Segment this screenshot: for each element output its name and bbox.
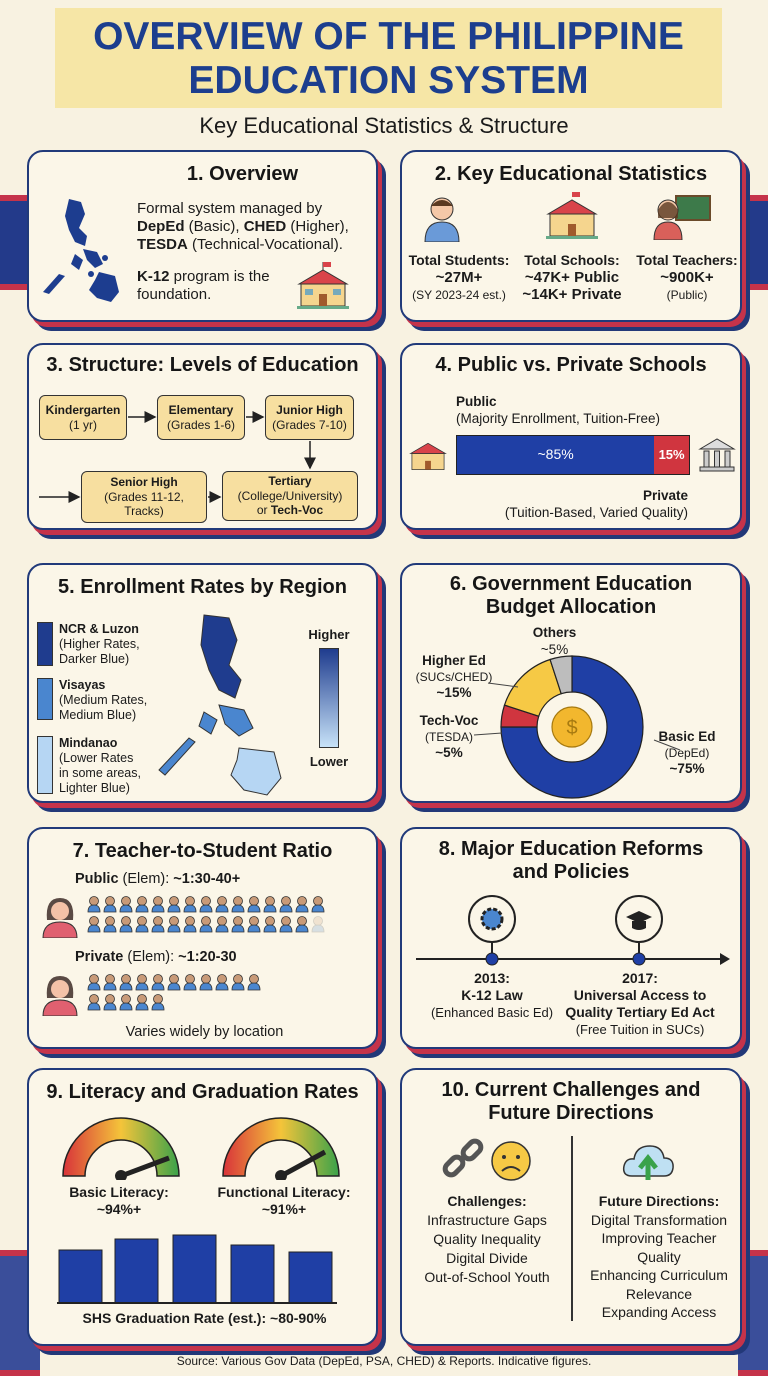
legend: Medium Blue) bbox=[59, 708, 136, 722]
heading bbox=[450, 573, 692, 618]
text: 2013: K-12 Law bbox=[461, 987, 523, 1003]
icon: school bbox=[297, 262, 349, 309]
icon: teacher public bbox=[42, 898, 78, 938]
legend: Lighter Blue) bbox=[59, 781, 130, 795]
title: EDUCATION SYSTEM bbox=[188, 59, 589, 102]
flow diagram: Junior High bbox=[276, 403, 343, 417]
panel: 7 teacher ratio bbox=[27, 827, 378, 1049]
legend: Mindanao bbox=[59, 736, 117, 750]
text: public label bbox=[456, 394, 660, 426]
text: private label: (Tuition-Based, Varied Quality) bbox=[505, 505, 688, 520]
donut chart: $ bbox=[566, 717, 578, 739]
stat: schools: ~14K+ Private bbox=[522, 286, 622, 303]
students private bbox=[88, 974, 260, 1010]
stat: teachers bbox=[636, 252, 738, 302]
text: 2017 bbox=[565, 970, 715, 1037]
stat: students: Total Students: bbox=[409, 252, 509, 268]
label: tech-voc: Tech-Voc bbox=[420, 713, 478, 728]
legend: (Lower Rates bbox=[59, 751, 133, 765]
flow diagram: Tertiary bbox=[268, 474, 312, 488]
icon: student bbox=[424, 198, 460, 242]
text: functional literacy: ~91%+ bbox=[262, 1201, 306, 1217]
text: description: TESDA (Technical-Vocational). bbox=[137, 236, 343, 253]
panel: 6 budget bbox=[400, 563, 742, 803]
legend: in some areas, bbox=[59, 766, 141, 780]
text: future: Enhancing Curriculum bbox=[590, 1267, 728, 1283]
text: future: Quality bbox=[637, 1248, 681, 1264]
text: challenges: Out-of-School Youth bbox=[424, 1269, 550, 1285]
text: public ratio: Public (Elem): ~1:30-40+ bbox=[75, 871, 240, 887]
label: basic ed bbox=[658, 729, 716, 776]
legend: NCR & Luzon bbox=[59, 622, 139, 636]
text: public label: (Majority Enrollment, Tuition-Free) bbox=[456, 411, 660, 426]
bar chart bbox=[456, 435, 690, 475]
heading: 9. Literacy and Graduation Rates bbox=[46, 1081, 359, 1103]
text: basic literacy: ~94%+ bbox=[97, 1201, 141, 1217]
text: 2017: 2017: bbox=[622, 970, 658, 986]
flow diagram: Elementary bbox=[169, 403, 233, 417]
icon: cloud upload bbox=[620, 1138, 676, 1182]
panel: 8 reforms bbox=[400, 827, 742, 1049]
text: challenges: Digital Divide bbox=[446, 1250, 528, 1266]
label: others bbox=[533, 625, 576, 657]
label: basic ed: Basic Ed bbox=[658, 729, 716, 744]
text: private ratio: Private (Elem): ~1:20-30 bbox=[75, 949, 237, 965]
label: higher ed bbox=[416, 653, 492, 700]
text: graduation rate: SHS Graduation Rate (est.): ~80-90% bbox=[83, 1310, 326, 1326]
text: k-12: foundation. bbox=[137, 286, 211, 303]
title: OVERVIEW OF THE PHILIPPINE bbox=[93, 15, 684, 58]
stat: teachers: Total Teachers: bbox=[636, 252, 738, 268]
text: challenges: Quality Inequality bbox=[433, 1231, 541, 1247]
icon: sad face bbox=[490, 1140, 532, 1182]
text: 2017: (Free Tuition in SUCs) bbox=[576, 1022, 704, 1037]
label: others: Others bbox=[533, 625, 576, 640]
heading bbox=[442, 1079, 700, 1124]
legend: gradient scale: Lower bbox=[310, 754, 348, 769]
stat: schools: ~47K+ Public bbox=[525, 269, 619, 286]
stat: students bbox=[408, 252, 509, 302]
heading bbox=[439, 838, 703, 883]
text: future: Improving Teacher bbox=[602, 1230, 716, 1246]
text: public label: Public bbox=[456, 394, 497, 409]
text: basic literacy bbox=[69, 1184, 169, 1217]
legend: Visayas bbox=[59, 678, 105, 692]
heading: 4. Public vs. Private Schools bbox=[435, 354, 707, 376]
heading: 1. Overview bbox=[187, 163, 298, 185]
stat: students: ~27M+ bbox=[436, 269, 482, 286]
panel: 10 challenges bbox=[400, 1068, 742, 1346]
label: higher ed: ~15% bbox=[437, 685, 471, 700]
label: basic ed: ~75% bbox=[670, 761, 704, 776]
heading: 7. Teacher-to-Student Ratio bbox=[73, 840, 332, 862]
icon: broken chain bbox=[440, 1138, 486, 1184]
stat: teachers: (Public) bbox=[667, 288, 707, 302]
stat: schools bbox=[522, 252, 622, 303]
icon: school bbox=[409, 442, 447, 470]
bar chart: graduation bbox=[57, 1234, 337, 1304]
icon: teacher private bbox=[42, 976, 78, 1016]
heading: 8. Major Education Reforms bbox=[439, 838, 703, 860]
gauge: functional literacy bbox=[222, 1117, 340, 1180]
bar chart: ~85% bbox=[537, 446, 574, 462]
heading: Future Directions bbox=[488, 1102, 654, 1124]
heading: 2. Key Educational Statistics bbox=[435, 163, 707, 185]
label: others: ~5% bbox=[541, 642, 568, 657]
text: 2017: Universal Access to bbox=[574, 987, 706, 1003]
text: functional literacy bbox=[217, 1184, 351, 1217]
text: note: Varies widely by location bbox=[126, 1024, 283, 1040]
title bbox=[55, 8, 722, 108]
text: 2013 bbox=[431, 970, 553, 1020]
legend: Darker Blue) bbox=[59, 652, 129, 666]
legend: (Medium Rates, bbox=[59, 693, 147, 707]
text: future: Relevance bbox=[626, 1286, 692, 1302]
icon: teacher bbox=[654, 195, 711, 240]
flow diagram: (College/University) bbox=[238, 489, 342, 503]
stat: schools: Total Schools: bbox=[524, 252, 620, 268]
timeline bbox=[416, 895, 730, 966]
label: tech-voc bbox=[420, 713, 478, 760]
text: description: DepEd (Basic), CHED (Higher), bbox=[137, 218, 349, 235]
bar chart: 15% bbox=[659, 447, 685, 462]
text: future: Future Directions: bbox=[599, 1193, 719, 1209]
text: basic literacy: Basic Literacy: bbox=[69, 1184, 169, 1200]
text: k-12: K-12 program is the bbox=[137, 268, 270, 285]
text: description bbox=[137, 200, 349, 253]
text: future bbox=[574, 1192, 744, 1322]
label: higher ed: Higher Ed bbox=[422, 653, 486, 668]
flow diagram bbox=[39, 395, 358, 523]
label: higher ed: (SUCs/CHED) bbox=[416, 670, 492, 684]
panel: 3 structure bbox=[27, 343, 378, 530]
footer: source: Source: Various Gov Data (DepEd, PSA, CHED) & Reports. Indicative figures. bbox=[177, 1354, 591, 1368]
text: challenges bbox=[407, 1192, 567, 1287]
flow diagram: (Grades 11-12, bbox=[104, 490, 184, 504]
stat: students: (SY 2023-24 est.) bbox=[412, 288, 506, 302]
flow diagram: (Grades 1-6) bbox=[167, 418, 235, 432]
heading: 10. Current Challenges and bbox=[442, 1079, 700, 1101]
icon: school bbox=[546, 192, 598, 239]
map: regions bbox=[158, 614, 282, 796]
subtitle: Key Educational Statistics & Structure bbox=[199, 113, 569, 138]
legend: gradient scale: Higher bbox=[308, 627, 350, 642]
text: 2013: 2013: bbox=[474, 970, 510, 986]
panel: 1 overview bbox=[27, 150, 378, 322]
label: basic ed: (DepEd) bbox=[665, 746, 709, 760]
heading: 3. Structure: Levels of Education bbox=[46, 354, 359, 376]
panel: 9 literacy bbox=[27, 1068, 378, 1346]
label: tech-voc: (TESDA) bbox=[425, 730, 473, 744]
heading: and Policies bbox=[513, 861, 629, 883]
icon: philippines map bbox=[43, 199, 119, 302]
text: future: Expanding Access bbox=[602, 1304, 716, 1320]
panel: 5 enrollment by region bbox=[27, 563, 378, 803]
legend bbox=[37, 622, 147, 795]
divider bbox=[571, 1136, 573, 1321]
text: challenges: Infrastructure Gaps bbox=[427, 1212, 547, 1228]
label: tech-voc: ~5% bbox=[435, 745, 463, 760]
heading: 5. Enrollment Rates by Region bbox=[58, 576, 347, 598]
flow diagram: Tracks) bbox=[124, 504, 164, 518]
text: future: Digital Transformation bbox=[591, 1212, 727, 1228]
panel: 4 public vs private bbox=[400, 343, 742, 530]
text: private label bbox=[505, 488, 688, 520]
legend: (Higher Rates, bbox=[59, 637, 140, 651]
text: 2013: (Enhanced Basic Ed) bbox=[431, 1005, 553, 1020]
heading: Budget Allocation bbox=[486, 596, 656, 618]
text: 2017: Quality Tertiary Ed Act bbox=[565, 1004, 715, 1020]
flow diagram: (1 yr) bbox=[69, 418, 97, 432]
text: description: Formal system managed by bbox=[137, 200, 322, 217]
text: challenges: Challenges: bbox=[447, 1193, 527, 1209]
donut chart bbox=[474, 655, 680, 799]
flow diagram: Kindergarten bbox=[46, 403, 120, 417]
text: k-12 bbox=[137, 268, 270, 303]
flow diagram: or Tech-Voc bbox=[257, 503, 323, 517]
text: functional literacy: Functional Literacy: bbox=[217, 1184, 351, 1200]
text: private label: Private bbox=[643, 488, 688, 503]
gauge: basic literacy bbox=[62, 1117, 180, 1180]
legend: gradient scale bbox=[308, 627, 350, 769]
flow diagram: (Grades 7-10) bbox=[272, 418, 347, 432]
icon: bank bbox=[698, 438, 736, 472]
students public bbox=[88, 896, 324, 932]
heading: 6. Government Education bbox=[450, 573, 692, 595]
flow diagram: Senior High bbox=[110, 475, 178, 489]
stat: teachers: ~900K+ bbox=[660, 269, 714, 286]
panel: 2 statistics bbox=[400, 150, 742, 322]
